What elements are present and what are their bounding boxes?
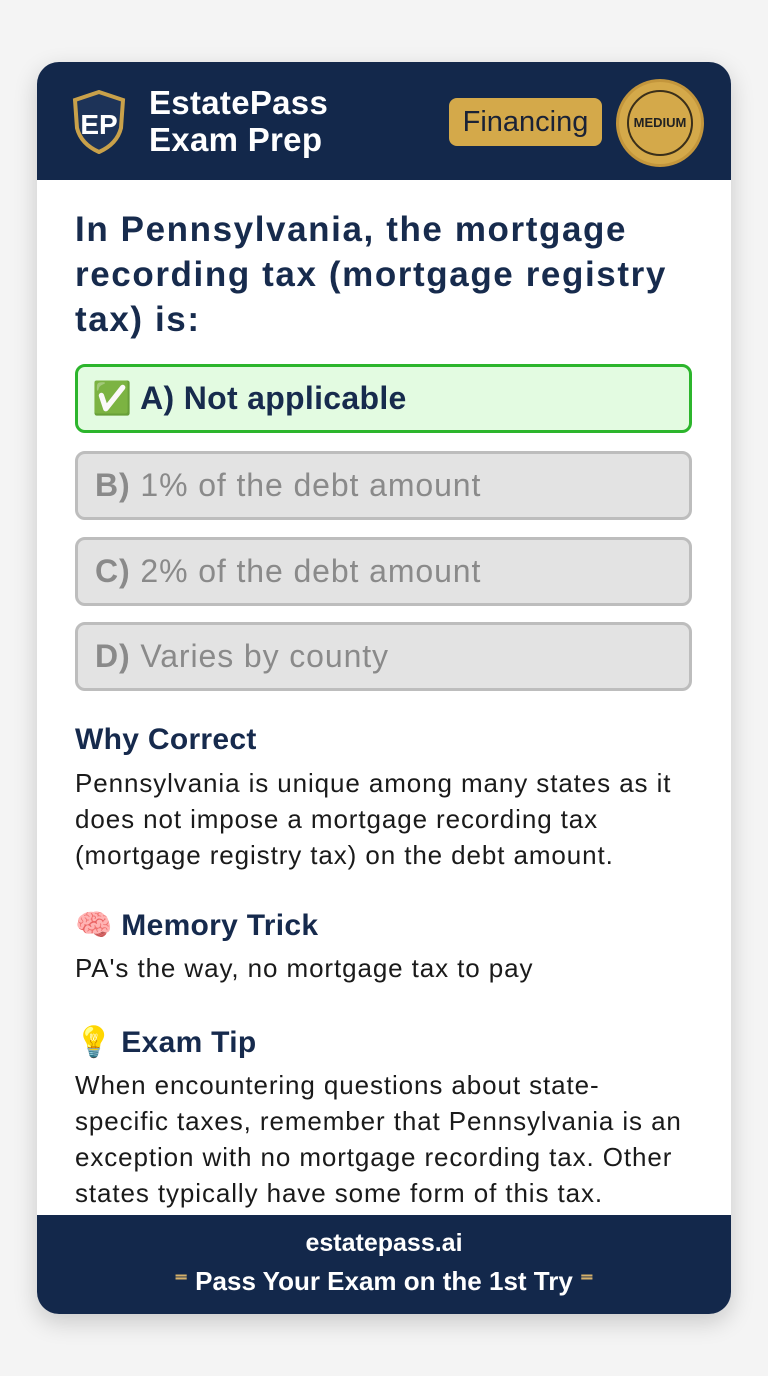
header [37, 62, 731, 180]
brand name: Exam Prep [149, 121, 322, 158]
difficulty badge [619, 82, 701, 164]
category tag [449, 98, 602, 146]
footer url: estatepass.ai [305, 1229, 463, 1257]
heading: memory trick: 🧠 Memory Trick [75, 909, 318, 942]
category tag: Financing [463, 106, 588, 138]
text: exam tip: exception with no mortgage recording tax. Other [75, 1142, 672, 1172]
option C [75, 537, 692, 606]
option A correct: ✅ A) Not applicable [92, 380, 407, 416]
footer tagline: ⁼ Pass Your Exam on the 1st Try ⁼ [174, 1266, 594, 1296]
text: exam tip: When encountering questions about state- [75, 1070, 600, 1100]
heading: exam tip: 💡 Exam Tip [75, 1026, 257, 1059]
text: why correct: (mortgage registry tax) on the debt amount. [75, 840, 614, 870]
text: why correct: does not impose a mortgage recording tax [75, 804, 598, 834]
question [75, 210, 667, 339]
text: exam tip: specific taxes, remember that Pennsylvania is an [75, 1106, 682, 1136]
text: why correct: Pennsylvania is unique among many states as it [75, 768, 671, 798]
icon: logo shield: EP [80, 109, 118, 140]
text: exam tip: states typically have some form of this tax. [75, 1178, 603, 1208]
brand name: EstatePass [149, 84, 328, 121]
text: memory trick: PA's the way, no mortgage tax to pay [75, 953, 533, 983]
question: In Pennsylvania, the mortgage [75, 210, 627, 249]
text: exam tip [75, 1070, 682, 1208]
brand name [149, 84, 328, 158]
text: why correct [75, 768, 671, 870]
option B [75, 451, 692, 520]
question: tax) is: [75, 300, 201, 339]
option A correct [75, 364, 692, 433]
option D [75, 622, 692, 691]
question: recording tax (mortgage registry [75, 255, 667, 294]
difficulty badge: MEDIUM [634, 115, 686, 130]
option D: D) Varies by county [95, 638, 389, 674]
heading: why correct: Why Correct [75, 723, 257, 756]
icon: logo shield [72, 90, 126, 154]
option C: C) 2% of the debt amount [95, 553, 481, 589]
footer [37, 1215, 731, 1314]
option B: B) 1% of the debt amount [95, 467, 481, 503]
